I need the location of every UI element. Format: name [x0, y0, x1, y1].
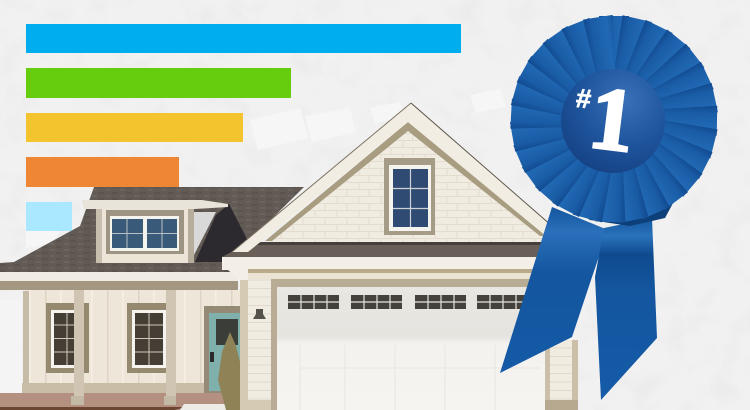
right porch window: [127, 303, 166, 373]
porch eave: [0, 272, 238, 281]
left ribbon tail: [500, 207, 608, 373]
hash sign: #: [575, 83, 593, 114]
porch wall: [25, 290, 241, 384]
gable inner tan trim: [265, 122, 546, 241]
right wall: [540, 340, 578, 410]
gable window: [384, 158, 435, 235]
house: [0, 103, 578, 410]
wall lamp: [253, 309, 266, 319]
left porch window: [46, 303, 89, 373]
front door: [204, 306, 240, 393]
garage windows: [288, 295, 528, 309]
bar 5: light blue: [26, 202, 72, 231]
rosette ribbon award: [500, 15, 718, 400]
gable white fascia: [232, 103, 552, 252]
porch columns: [71, 290, 176, 405]
bar 2: green: [26, 68, 291, 98]
main hip roof: [0, 187, 304, 272]
bar 1: blue: [26, 24, 461, 53]
garage wall and pilaster: [240, 270, 278, 410]
porch base: [22, 383, 208, 393]
garage fascia: [222, 257, 540, 280]
bar 4: orange: [26, 157, 179, 187]
bar 3: yellow: [26, 113, 243, 142]
garage door: [277, 287, 545, 410]
roof shadow beside dormer: [195, 204, 248, 262]
dormer fascia: [82, 200, 228, 209]
right ribbon tail: [595, 218, 657, 400]
number one label: [575, 68, 641, 172]
rosette disc: [512, 17, 716, 221]
garage door trim: [271, 279, 539, 287]
porch floor: [0, 393, 230, 410]
numeral 1: 1: [584, 68, 641, 172]
centre button: [561, 69, 665, 173]
shrub: [218, 332, 240, 410]
dormer window: [110, 216, 179, 251]
bar chart: [26, 24, 461, 231]
dormer wall: [96, 208, 194, 263]
gable wall: [265, 122, 546, 244]
lower garage roof: [222, 242, 541, 257]
rosette pleats: [510, 15, 718, 223]
